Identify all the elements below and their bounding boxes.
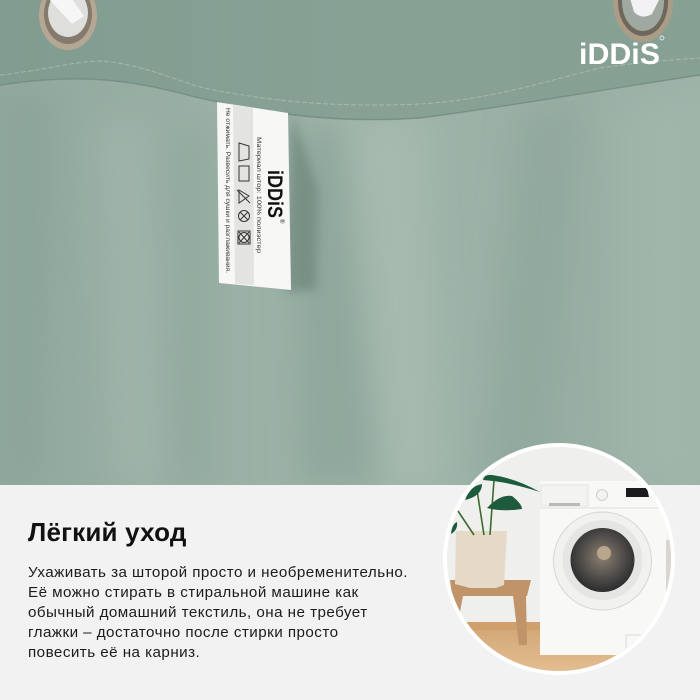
body text: обычный домашний текстиль, она не требует (28, 604, 368, 621)
washing machine (540, 481, 667, 655)
body text: Её можно стирать в стиральной машине как (28, 584, 359, 601)
label material text: Материал штор: 100% полиэстер (255, 137, 262, 254)
label brand: iDDiS (263, 170, 286, 218)
plant (458, 480, 494, 535)
body text: глажки – достаточно после стирки просто (28, 624, 338, 641)
body text: повесить её на карниз. (28, 644, 200, 661)
label care text: Не отжимать. Развесить для сушки и разглаживания. (224, 108, 231, 273)
care label (217, 102, 291, 290)
label brand: ® (278, 219, 285, 224)
panel: text background (0, 485, 700, 700)
body text (28, 564, 408, 661)
body text: Ухаживать за шторой просто и необременительно. (28, 564, 408, 581)
stool (450, 580, 531, 645)
logo (581, 36, 664, 64)
curtain hem (0, 0, 700, 120)
logo: iDDiS (579, 38, 660, 71)
care icons (237, 143, 250, 244)
laundry photo circle (440, 440, 680, 680)
label brand (268, 171, 285, 224)
floor (472, 630, 646, 671)
tote bag (455, 531, 507, 588)
grommet: right (613, 0, 673, 42)
text block (28, 517, 408, 661)
grommet: left (39, 0, 97, 50)
curtain folds (300, 136, 540, 482)
label shadow (285, 112, 318, 292)
panel: curtain photo (0, 0, 700, 485)
heading: Лёгкий уход (28, 517, 187, 547)
